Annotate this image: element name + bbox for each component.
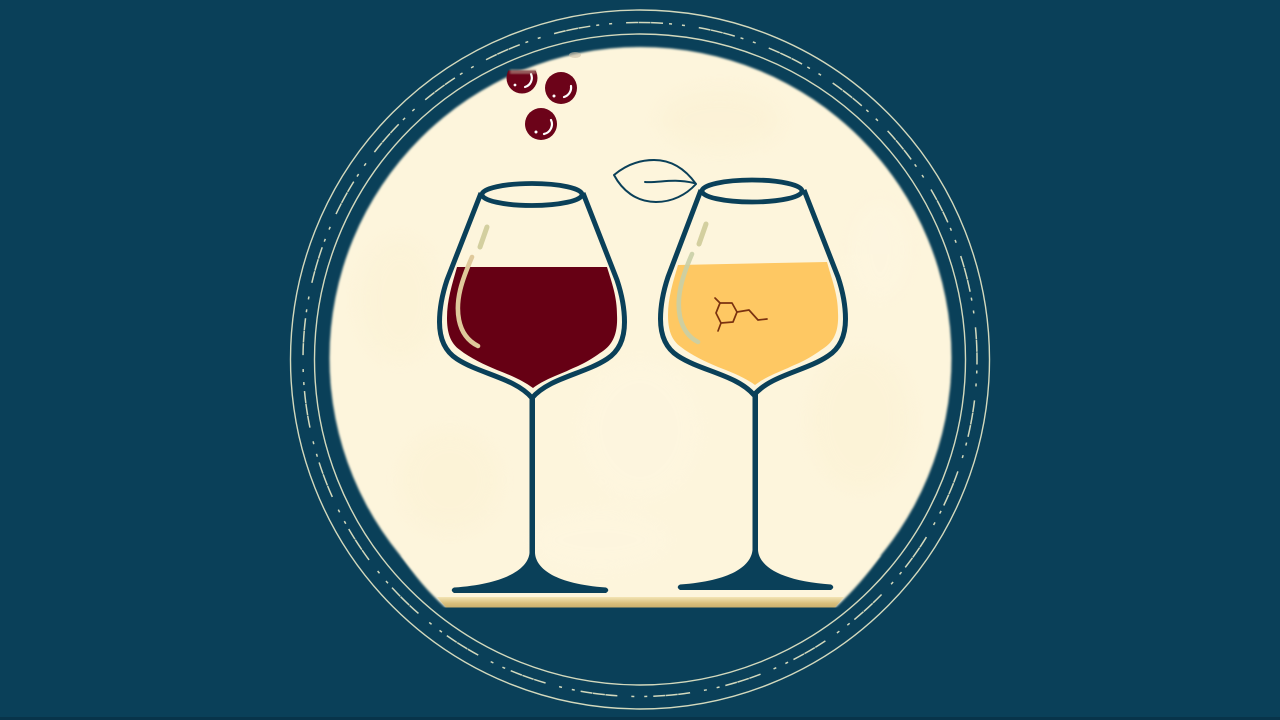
grape: right	[545, 72, 577, 104]
white wine	[668, 262, 838, 385]
highlight	[480, 227, 487, 247]
icon: molecule	[715, 298, 767, 331]
white wine glass	[660, 180, 846, 590]
grape: fragment at top	[569, 52, 581, 58]
glass outline	[440, 193, 624, 398]
glass rim	[702, 180, 802, 202]
stem and foot	[452, 396, 608, 593]
ring border	[290, 10, 990, 709]
grape: lower	[525, 108, 557, 140]
cream paper disc	[330, 47, 952, 669]
grapes	[506, 52, 581, 140]
red wine	[447, 267, 617, 388]
grape: clipped top	[506, 70, 538, 94]
glass outline	[660, 190, 846, 395]
glass rim	[482, 184, 582, 206]
icon: leaf	[614, 160, 696, 202]
table edge	[437, 597, 844, 608]
stem and foot	[678, 393, 833, 590]
highlight	[699, 224, 706, 244]
red wine glass	[440, 184, 624, 593]
